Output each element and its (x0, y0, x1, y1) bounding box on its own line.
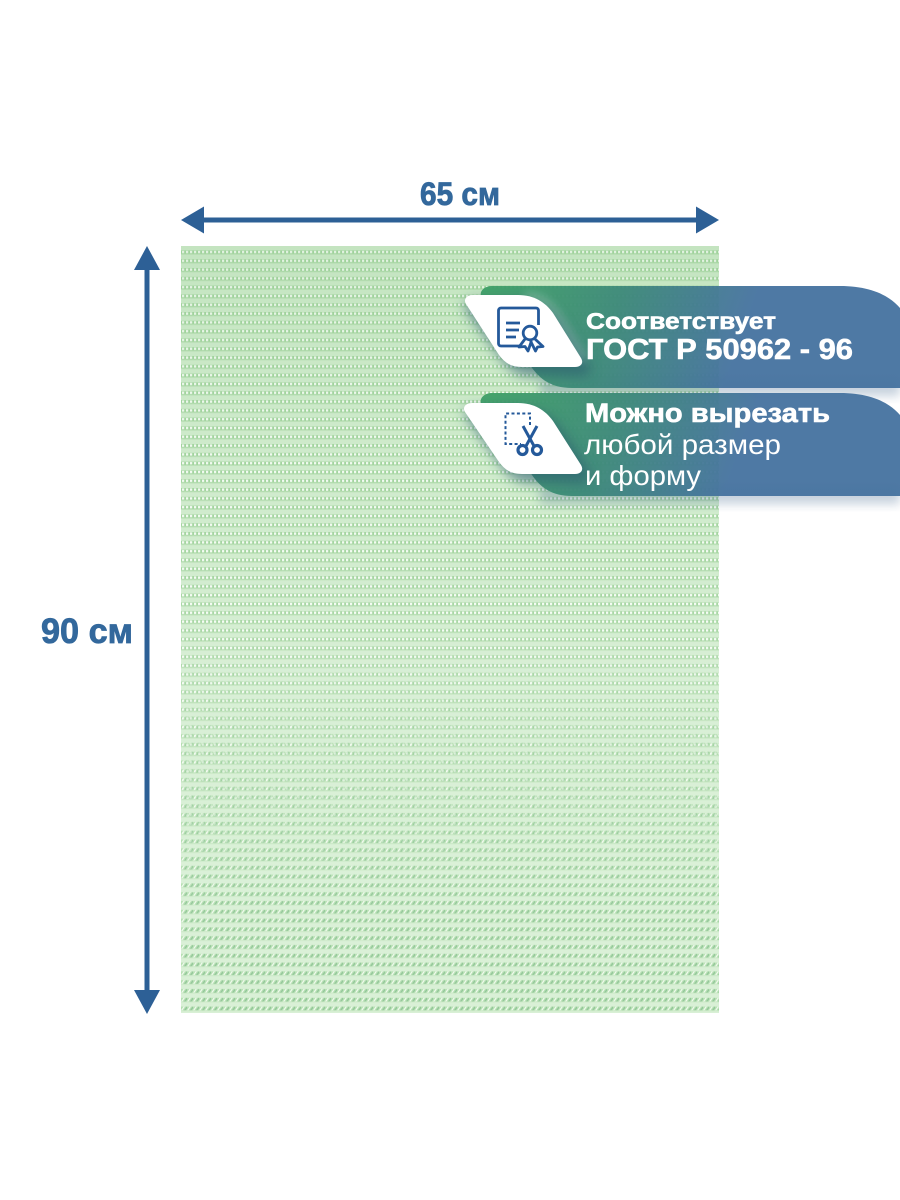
text: GOST compliance (586, 308, 853, 366)
arrow: width dimension (181, 206, 719, 234)
white plate shadow: GOST (465, 300, 591, 376)
text: cut to any size: и форму (585, 460, 701, 491)
infographic canvas (42, 182, 900, 1014)
label: width 65 cm: 65 см (420, 176, 500, 212)
banner haze: GOST (540, 378, 900, 396)
white plate: cutting (464, 403, 582, 474)
banner haze: cutting (540, 486, 900, 504)
panel: cut to any size badge (464, 393, 900, 504)
banner background: GOST (481, 286, 900, 388)
white plate shadow: cutting (465, 408, 591, 483)
white plate glow: GOST (525, 296, 584, 360)
label: height 90 cm: 90 см (41, 612, 133, 651)
text: GOST compliance: ГОСТ Р 50962 - 96 (586, 334, 853, 366)
text: GOST compliance: Соответствует (586, 308, 776, 334)
text: cut to any size: Можно вырезать (585, 398, 830, 428)
icon: scissors with dashed square (506, 414, 542, 454)
arrow: height dimension (134, 246, 160, 1014)
banner background: cutting (481, 393, 900, 496)
panel: GOST compliance badge (465, 286, 900, 396)
text: cut to any size (584, 398, 830, 491)
white plate: GOST (465, 295, 582, 367)
icon: certificate (498, 308, 543, 351)
green mat with woven texture (181, 246, 719, 1013)
text: cut to any size: любой размер (584, 429, 781, 460)
